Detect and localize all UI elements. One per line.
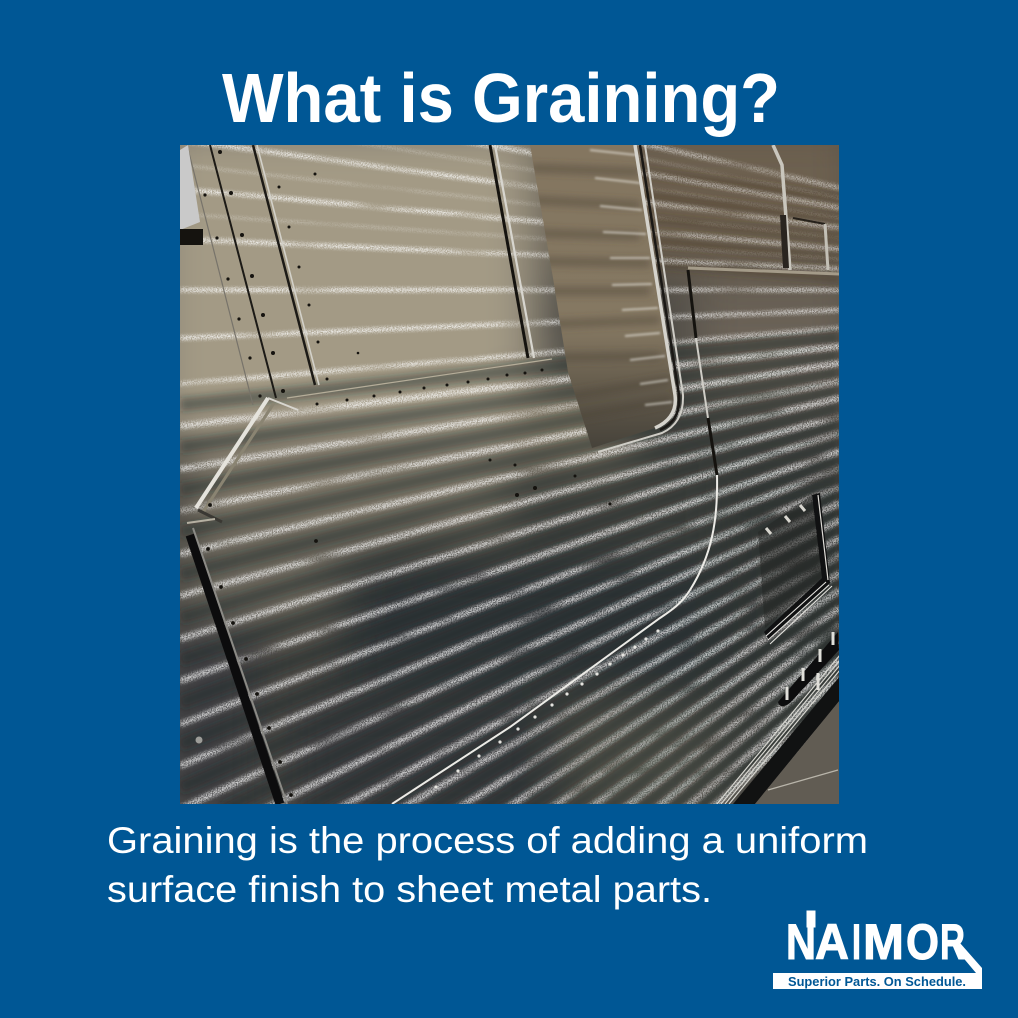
right panel top edge xyxy=(688,268,840,475)
logo: Naimor: M xyxy=(863,914,904,970)
description text: Graining is the process of adding a uniform xyxy=(107,820,868,861)
description text: surface finish to sheet metal parts. xyxy=(107,869,712,910)
photo: grained sheet metal aircraft panels xyxy=(180,145,839,804)
logo: Naimor xyxy=(773,911,982,989)
title: What is Graining? xyxy=(222,59,780,137)
bright rivet holes along seam xyxy=(196,629,660,789)
angled bracket strip xyxy=(196,398,298,522)
logo: Naimor: R xyxy=(940,914,965,970)
small upper-right window xyxy=(773,145,828,270)
logo: Naimor: I xyxy=(852,914,861,970)
curved panel seam xyxy=(392,475,717,804)
top-left corner background xyxy=(180,145,203,245)
raised window panel xyxy=(530,145,683,452)
logo: Naimor: Superior Parts. On Schedule. xyxy=(788,974,966,989)
dark bands between grain streaks xyxy=(180,172,840,810)
infographic canvas xyxy=(108,72,982,989)
lower-right window cut-out xyxy=(758,493,832,644)
left panel strips xyxy=(187,145,552,405)
grain streaks xyxy=(180,145,839,804)
description text xyxy=(107,820,868,910)
logo: Naimor: O xyxy=(906,914,939,970)
bottom-right rail and floor xyxy=(717,632,840,804)
logo: Naimor: N xyxy=(786,914,816,970)
rivet holes xyxy=(203,150,612,797)
lower panel left edge xyxy=(187,519,287,804)
logo: Naimor: A xyxy=(815,914,849,970)
